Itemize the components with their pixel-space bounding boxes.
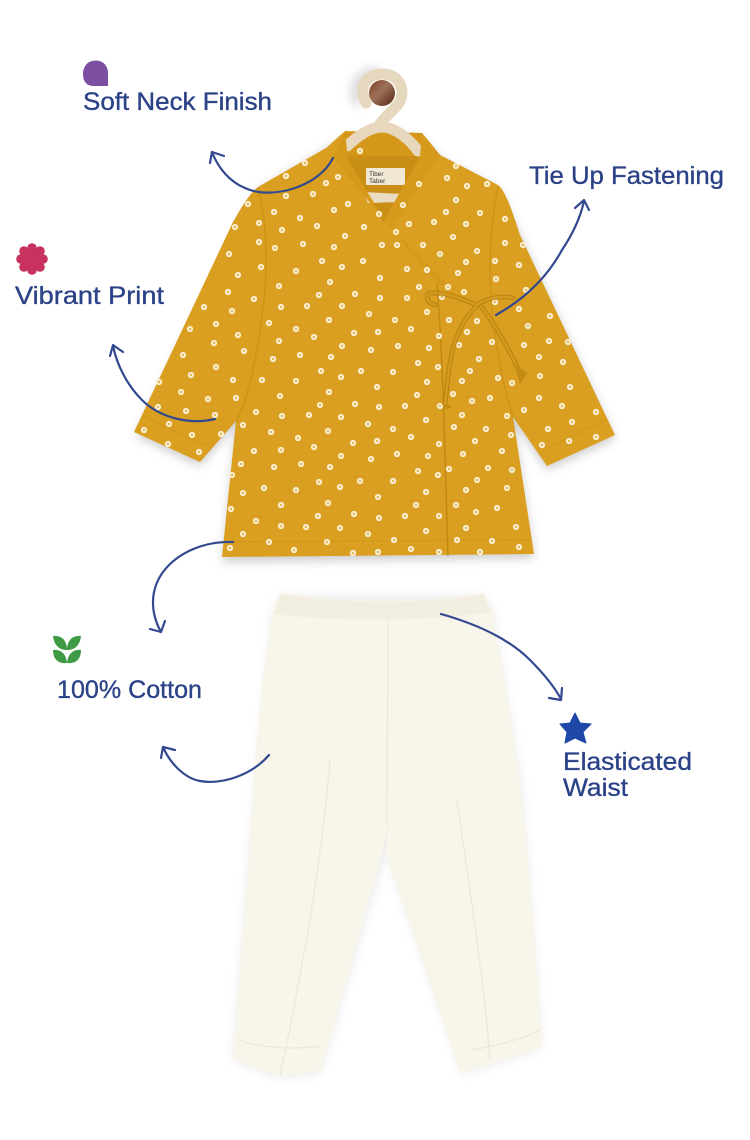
sleeve and placket seams [143, 186, 605, 556]
kurta body and sleeves [134, 131, 615, 557]
label: Vibrant Print [15, 282, 164, 310]
label [563, 748, 692, 802]
label: Elasticated [563, 748, 692, 776]
neck label [366, 168, 405, 185]
hanger [355, 72, 402, 124]
inner back neck [345, 132, 422, 224]
callout: tie up fastening [496, 162, 724, 315]
left collar band [333, 131, 452, 288]
callout: soft neck finish [83, 60, 333, 193]
arrow to cotton from pants [161, 747, 269, 782]
tie string end [514, 364, 527, 384]
hanger hook [363, 74, 402, 124]
kurta top [134, 127, 615, 557]
arrow [441, 614, 562, 700]
label: Soft Neck Finish [83, 88, 272, 116]
label: Tie Up Fastening [529, 162, 724, 190]
callout: elasticated waist [441, 614, 692, 802]
arrow [110, 345, 215, 421]
kurta shadow [136, 138, 615, 562]
tie-up fastening strings [427, 293, 521, 405]
icon: blue star [560, 713, 591, 743]
arrow to cotton from kurta [150, 542, 233, 632]
pants silhouette [233, 593, 542, 1077]
callout: 100% cotton [53, 542, 269, 782]
callout: vibrant print [15, 243, 215, 421]
elastic waistband [274, 594, 491, 620]
hanger front bar [363, 192, 403, 203]
hanger knob [369, 80, 395, 106]
label: Waist [563, 774, 628, 802]
pants shadow [233, 596, 542, 1078]
arrow [210, 152, 333, 193]
back neck yoke [346, 132, 422, 156]
pants creases and hems [238, 612, 540, 1076]
bandhani dot print [142, 149, 598, 555]
icon: purple drop [83, 60, 108, 86]
icon: green leaves [53, 636, 81, 663]
neck label: Taber [369, 178, 386, 185]
neck label: Tiber [369, 171, 384, 178]
label: 100% Cotton [57, 676, 202, 704]
tie string tip [441, 403, 452, 410]
arrow [496, 200, 589, 315]
right collar band [383, 133, 440, 229]
hanger shoulders [347, 127, 418, 151]
pants [233, 593, 542, 1077]
icon: red flower [16, 243, 48, 275]
